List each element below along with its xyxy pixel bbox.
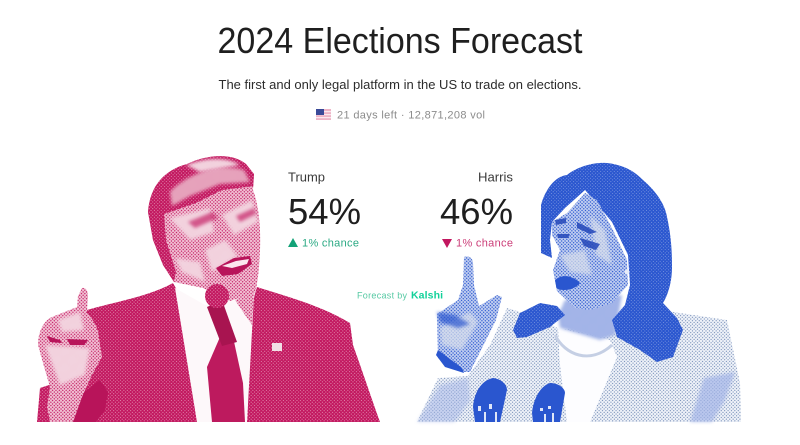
change: 1% chance xyxy=(302,238,359,250)
tie xyxy=(207,337,245,422)
lips xyxy=(555,276,580,290)
days left and volume: 21 days left · 12,871,208 vol xyxy=(337,110,485,122)
microphone handle xyxy=(207,300,237,346)
change: 1% chance xyxy=(456,238,513,250)
cuff shadow xyxy=(73,380,108,422)
brows and eyes xyxy=(555,218,600,250)
face highlights xyxy=(170,200,258,282)
face base xyxy=(148,156,260,301)
hair xyxy=(148,156,254,282)
candidate name: Trump xyxy=(288,170,325,184)
title: 2024 Elections Forecast xyxy=(218,20,582,61)
percentage: 54% xyxy=(288,191,361,232)
face base xyxy=(552,193,628,310)
mic grille highlights xyxy=(478,404,554,422)
microphone xyxy=(205,284,237,346)
face highlights xyxy=(560,215,612,275)
necklace xyxy=(555,335,612,356)
icon: up triangle xyxy=(288,238,298,247)
hand xyxy=(38,288,102,422)
subtitle: The first and only legal platform in the US to trade on elections. xyxy=(218,77,582,92)
market meta line xyxy=(316,109,485,122)
hand shadow xyxy=(437,312,470,328)
jacket xyxy=(37,283,197,422)
candidate name: Harris xyxy=(478,170,513,184)
jacket xyxy=(417,308,741,422)
shirt xyxy=(558,328,617,422)
neck xyxy=(558,295,622,340)
percentage: 46% xyxy=(440,191,513,232)
finger creases xyxy=(47,336,88,345)
face xyxy=(552,193,628,310)
microphone right xyxy=(532,383,565,422)
shirt xyxy=(175,288,254,422)
hair sheen xyxy=(170,168,250,206)
earring xyxy=(624,270,630,274)
hand highlights xyxy=(440,312,478,350)
head xyxy=(148,156,260,301)
hand xyxy=(437,256,502,372)
Kalshi logo: Kalshi xyxy=(411,290,443,302)
jacket shadow xyxy=(690,372,735,422)
icon: down triangle xyxy=(442,239,452,248)
sleeve cuff xyxy=(436,350,464,373)
forecast by: Forecast by xyxy=(357,290,408,300)
credit: Forecast by Kalshi xyxy=(357,290,443,302)
microphones xyxy=(473,378,565,422)
stat: Trump xyxy=(288,170,361,250)
microphone head xyxy=(205,284,229,308)
hair xyxy=(541,163,683,362)
mouth xyxy=(216,256,252,276)
collar shadow xyxy=(235,292,254,325)
stat: Harris xyxy=(440,170,513,250)
hand highlights xyxy=(45,312,90,385)
microphone left xyxy=(473,378,507,422)
left hair lock xyxy=(513,303,565,338)
portrait: Trump xyxy=(37,150,380,422)
brow shadows xyxy=(188,208,256,228)
icon: US flag xyxy=(316,109,331,120)
portrait: Harris xyxy=(417,163,741,422)
lapel pin xyxy=(272,343,282,351)
